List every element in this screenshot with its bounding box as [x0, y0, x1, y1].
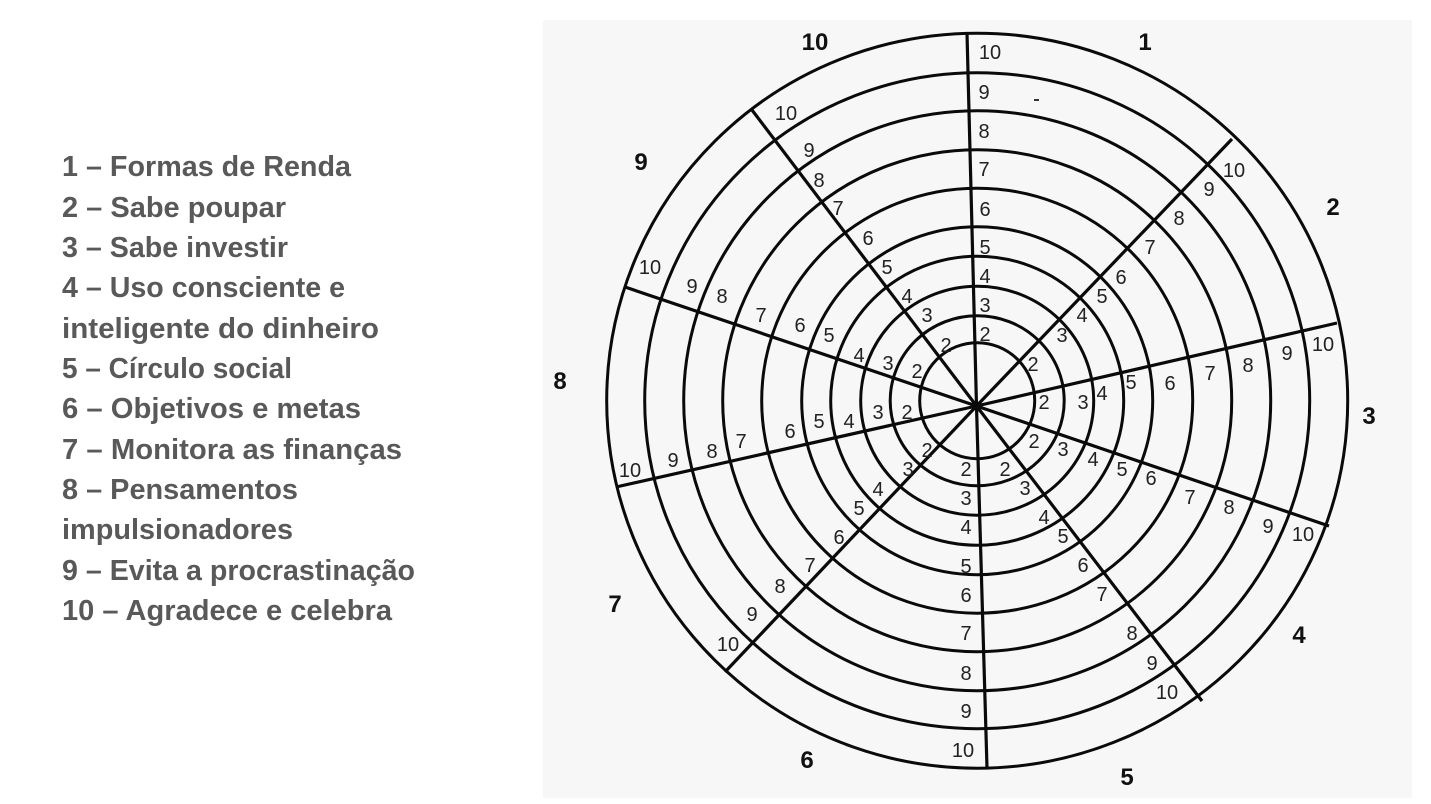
spoke 6 with scale: 10: [952, 740, 974, 762]
spoke 9 with scale: 7: [755, 305, 767, 327]
spoke 3 with scale: [976, 323, 1337, 414]
spoke 4 with scale: 3: [1057, 439, 1069, 461]
spoke 7 with scale: 3: [902, 459, 914, 481]
spoke 7 with scale: 9: [746, 604, 758, 626]
spoke 4 with scale: 6: [1145, 468, 1157, 490]
spoke 5 with scale: [976, 406, 1202, 704]
legend item 9: 9 – Evita a procrastinação: [62, 555, 415, 587]
spoke 2 with scale: 6: [1115, 267, 1127, 289]
section numbers around wheel: 2: [1326, 194, 1340, 221]
spoke 3 with scale: 7: [1204, 363, 1216, 385]
legend item 7: 7 – Monitora as finanças: [62, 434, 402, 466]
spoke 6 with scale: 9: [960, 701, 972, 723]
spoke 8 with scale: 7: [735, 431, 747, 453]
legend item 8: 8 – Pensamentos: [62, 474, 298, 506]
spoke 2 with scale: 10: [1223, 160, 1245, 182]
spoke 8 with scale: [616, 402, 976, 487]
spoke 6 with scale: 2: [960, 459, 972, 481]
spoke 6 with scale: 8: [960, 663, 972, 685]
spoke 8 with scale: 2: [901, 402, 913, 424]
spoke 9 with scale: [625, 257, 976, 406]
legend item 2: 2 – Sabe poupar: [62, 192, 286, 224]
spoke 3 with scale: 9: [1281, 343, 1293, 365]
section numbers around wheel: [553, 29, 1376, 791]
section numbers around wheel: 10: [802, 29, 828, 56]
spoke 8 with scale: 4: [843, 411, 855, 433]
spoke 8 with scale: 8: [706, 441, 718, 463]
spoke 5 with scale: 8: [1126, 623, 1138, 645]
spoke 4 with scale: 4: [1087, 449, 1099, 471]
spoke 6 with scale: 4: [960, 517, 972, 539]
spoke 5 with scale: 6: [1077, 555, 1089, 577]
legend item 4: inteligente do dinheiro: [62, 313, 379, 345]
spoke 3 with scale: 10: [1312, 334, 1334, 356]
spoke 1 with scale: 5: [979, 237, 991, 259]
section numbers around wheel: 6: [800, 747, 814, 774]
section numbers around wheel: 7: [608, 591, 622, 618]
section numbers around wheel: 5: [1120, 764, 1134, 791]
spoke 5 with scale: 10: [1156, 682, 1178, 704]
legend item 8: impulsionadores: [62, 514, 293, 546]
centre hub: [972, 402, 981, 410]
spoke 2 with scale: 4: [1076, 305, 1088, 327]
spoke 1 with scale: 10: [979, 42, 1001, 64]
spoke 3 with scale: 3: [1077, 392, 1089, 414]
spoke 10 with scale: 10: [775, 103, 797, 125]
spoke 2 with scale: 5: [1096, 286, 1108, 308]
legend item 3: 3 – Sabe investir: [62, 232, 288, 264]
section numbers around wheel: 8: [553, 368, 567, 395]
spoke 5 with scale: 9: [1146, 653, 1158, 675]
section numbers around wheel: 3: [1362, 403, 1376, 430]
spoke 8 with scale: 6: [784, 421, 796, 443]
spoke 6 with scale: 7: [960, 623, 972, 645]
spoke 1 with scale: 2: [979, 324, 991, 346]
spoke 7 with scale: 10: [717, 634, 739, 656]
legend item 4: 4 – Uso consciente e: [62, 272, 345, 304]
section numbers around wheel: 1: [1138, 29, 1152, 56]
spoke 1 with scale: 6: [979, 199, 991, 221]
spoke 10 with scale: 5: [881, 257, 893, 279]
spoke 10 with scale: 3: [921, 305, 933, 327]
spoke 7 with scale: 6: [833, 527, 845, 549]
spoke 10 with scale: 6: [862, 228, 874, 250]
spoke 10 with scale: 4: [901, 286, 913, 308]
spoke 4 with scale: 8: [1223, 497, 1235, 519]
spoke 9 with scale: 5: [823, 325, 835, 347]
spoke 4 with scale: 5: [1116, 459, 1128, 481]
panel: wheel background: [543, 20, 1412, 798]
spoke 2 with scale: [976, 139, 1245, 406]
spoke 7 with scale: 7: [804, 555, 816, 577]
spoke 8 with scale: 3: [872, 402, 884, 424]
section numbers around wheel: 4: [1292, 622, 1306, 649]
spoke 6 with scale: 3: [960, 488, 972, 510]
spoke 2 with scale: 3: [1056, 325, 1068, 347]
spoke 7 with scale: 5: [853, 498, 865, 520]
spoke 6 with scale: 5: [960, 556, 972, 578]
spoke 2 with scale: 9: [1203, 179, 1215, 201]
spoke 7 with scale: 4: [872, 479, 884, 501]
spoke 10 with scale: [752, 103, 976, 406]
spoke 2 with scale: 8: [1173, 208, 1185, 230]
spoke 8 with scale: 5: [813, 411, 825, 433]
spoke 3 with scale: 2: [1038, 392, 1050, 414]
spoke 2 with scale: 2: [1027, 354, 1039, 376]
spoke 4 with scale: 7: [1184, 487, 1196, 509]
spoke 7 with scale: [717, 406, 976, 672]
spoke 4 with scale: 9: [1262, 516, 1274, 538]
spoke 1 with scale: 9: [978, 82, 990, 104]
spoke 3 with scale: 5: [1125, 372, 1137, 394]
spoke 10 with scale: 9: [803, 140, 815, 162]
spoke 3 with scale: 6: [1164, 373, 1176, 395]
spoke 4 with scale: [976, 406, 1329, 546]
spoke 5 with scale: 4: [1038, 507, 1050, 529]
spoke 3 with scale: 8: [1242, 355, 1254, 377]
legend item 5: 5 – Círculo social: [62, 353, 292, 385]
legend item 8: [62, 474, 298, 546]
spoke 2 with scale: 7: [1144, 237, 1156, 259]
spoke 9 with scale: 4: [853, 345, 865, 367]
spoke 5 with scale: 3: [1019, 478, 1031, 500]
spoke 10 with scale: 7: [832, 198, 844, 220]
legend item 1: 1 – Formas de Renda: [62, 151, 352, 183]
legend: ten wheel categories: [62, 151, 415, 627]
spoke 4 with scale: 10: [1292, 524, 1314, 546]
spoke 10 with scale: 2: [940, 335, 952, 357]
spoke 1 with scale: 4: [979, 266, 991, 288]
spoke 9 with scale: 10: [639, 257, 661, 279]
spoke 1 with scale: [967, 33, 1001, 406]
spoke 8 with scale: 10: [619, 460, 641, 482]
spoke 6 with scale: [952, 406, 987, 768]
spoke 4 with scale: 2: [1028, 431, 1040, 453]
spoke 9 with scale: 6: [794, 315, 806, 337]
spoke 7 with scale: 2: [921, 440, 933, 462]
legend item 6: 6 – Objetivos e metas: [62, 393, 361, 425]
spoke 9 with scale: 9: [686, 276, 698, 298]
legend item 4: [62, 272, 379, 345]
concentric rings: [607, 33, 1348, 768]
spoke 1 with scale: 8: [978, 121, 990, 143]
spoke 9 with scale: 3: [882, 353, 894, 375]
spoke 5 with scale: 5: [1057, 526, 1069, 548]
spoke 9 with scale: 8: [716, 286, 728, 308]
spoke 5 with scale: 7: [1096, 584, 1108, 606]
legend item 10: 10 – Agradece e celebra: [62, 595, 393, 627]
spoke 9 with scale: 2: [911, 361, 923, 383]
spoke 1 with scale: 3: [979, 295, 991, 317]
spoke 7 with scale: 8: [774, 576, 786, 598]
spoke 3 with scale: 4: [1096, 383, 1108, 405]
spoke 1 with scale: 7: [978, 159, 990, 181]
spoke 8 with scale: 9: [667, 450, 679, 472]
spoke 5 with scale: 2: [999, 459, 1011, 481]
spoke 6 with scale: 6: [960, 585, 972, 607]
section numbers around wheel: 9: [634, 149, 648, 176]
spoke 10 with scale: 8: [813, 170, 825, 192]
